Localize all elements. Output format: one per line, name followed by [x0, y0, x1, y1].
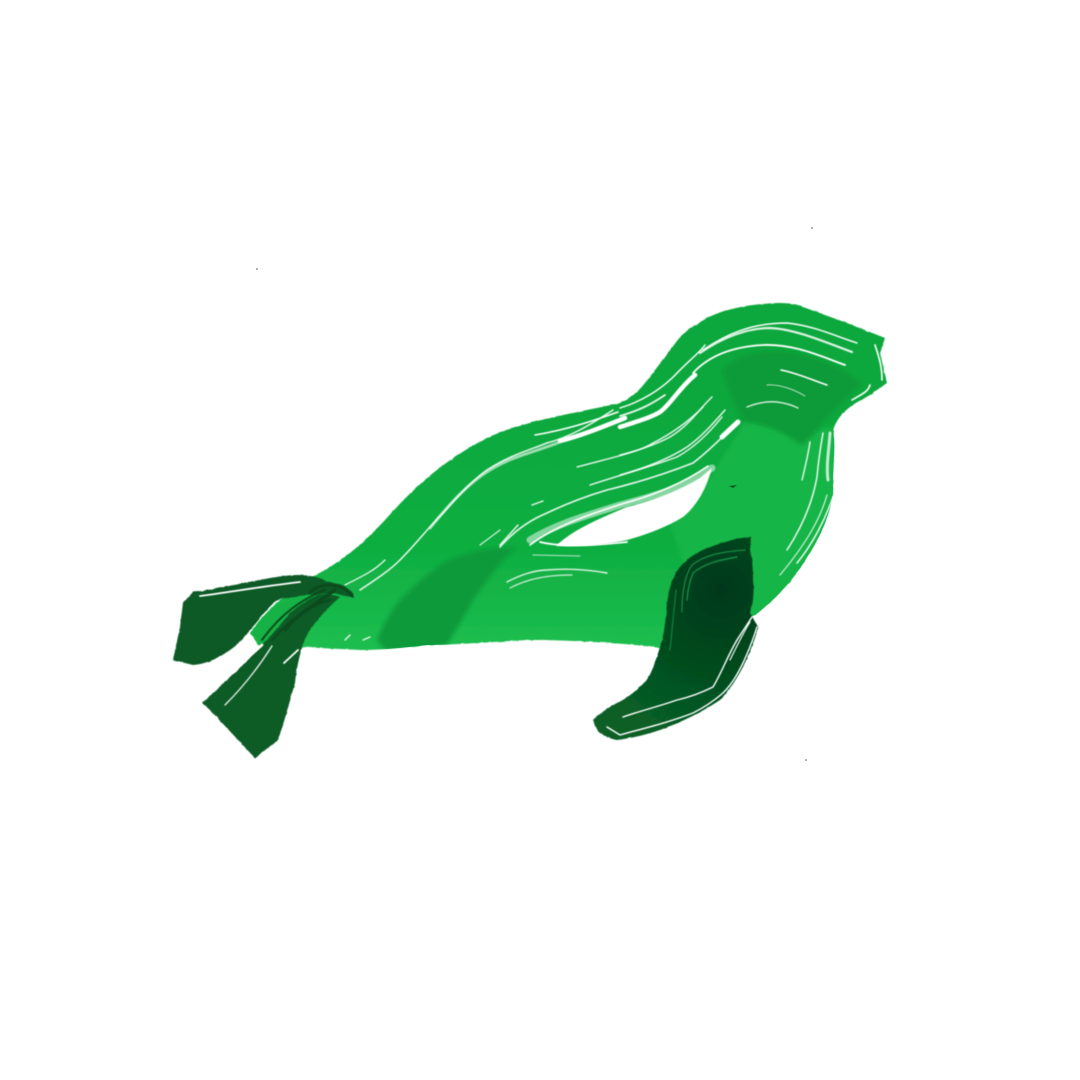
small ink specks — [256, 227, 813, 761]
brighter paint on the chest — [670, 421, 840, 620]
tail: upper lobe — [173, 575, 354, 665]
front flipper — [593, 537, 758, 740]
white dry-brush streaks — [345, 323, 882, 640]
tail: bright paint showing through the fin join — [250, 596, 312, 650]
seal figure — [173, 303, 887, 758]
paint washes inside the body — [377, 351, 862, 650]
darker arch of paint at the neck — [722, 351, 862, 445]
flipper streaks — [607, 550, 757, 735]
darker overlap stroke on the belly — [377, 547, 517, 650]
tail streaks — [200, 582, 352, 705]
illustration: green brush-painted seal — [172, 227, 888, 761]
hole between neck and belly — [556, 468, 712, 546]
tail: lower lobe — [202, 594, 340, 758]
seal body and head — [250, 303, 887, 650]
